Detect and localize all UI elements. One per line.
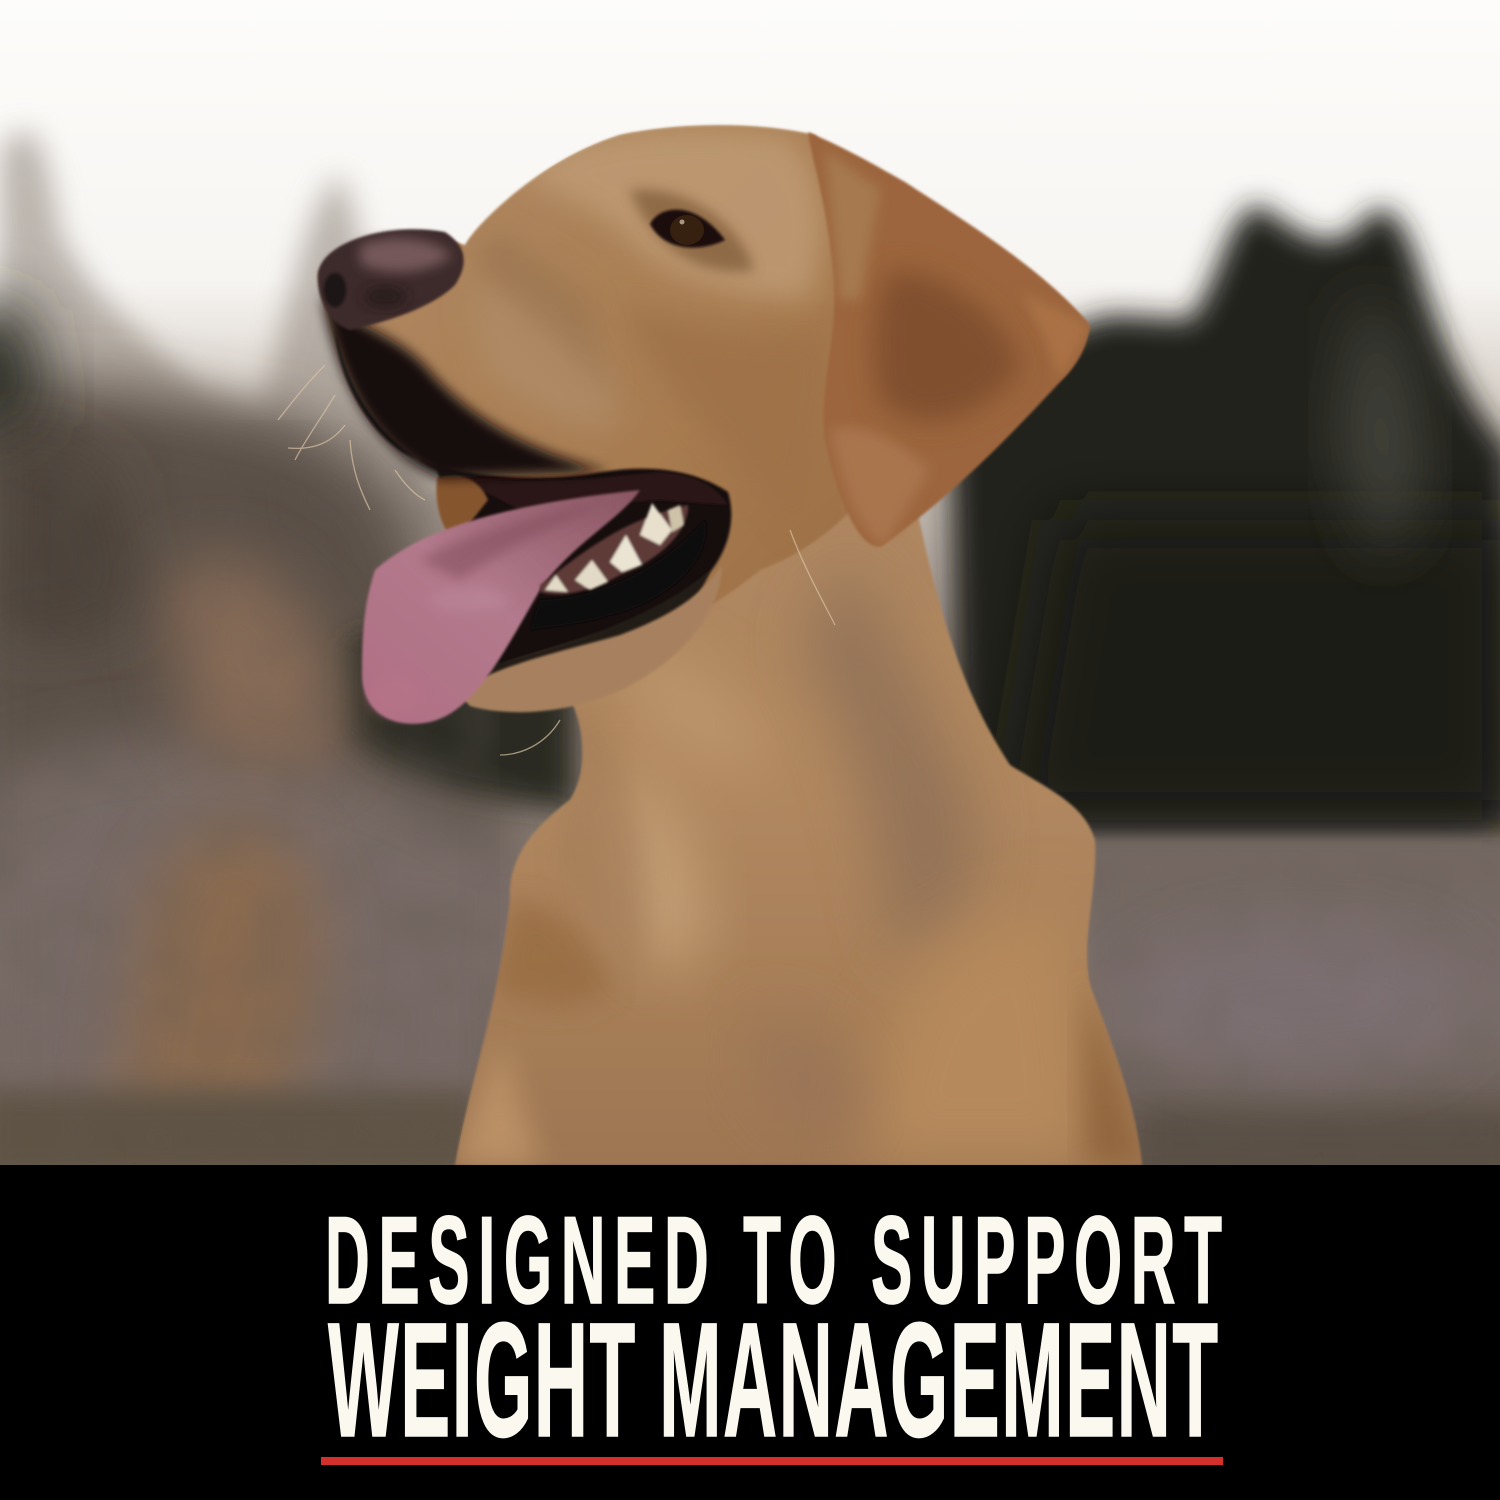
dog: teeth and gums — [540, 503, 688, 594]
dog: tongue — [362, 490, 640, 724]
dog: mouth interior and black lips — [335, 325, 731, 690]
photo: dog in a field — [0, 0, 1500, 1180]
red underline — [321, 1457, 1223, 1465]
dog: chin fur — [456, 565, 722, 712]
dog: whiskers — [278, 365, 835, 755]
dog: neck and chest — [454, 512, 1143, 1165]
dog: black upper lip below nose — [322, 295, 610, 478]
dog: nose — [318, 229, 464, 330]
background: sky — [0, 0, 1500, 1165]
dog: head — [317, 123, 848, 603]
heading: line one: DESIGNED TO SUPPORT — [325, 1190, 1222, 1330]
dog: eye — [650, 210, 725, 248]
dog: inner ear behind mouth — [434, 474, 490, 530]
banner: black caption strip — [0, 1165, 1500, 1500]
heading: line two: WEIGHT MANAGEMENT — [328, 1288, 1218, 1471]
dog: lower lip — [530, 520, 706, 630]
dog: ear — [808, 132, 1090, 546]
background: blurred trees and field — [0, 131, 1500, 1180]
